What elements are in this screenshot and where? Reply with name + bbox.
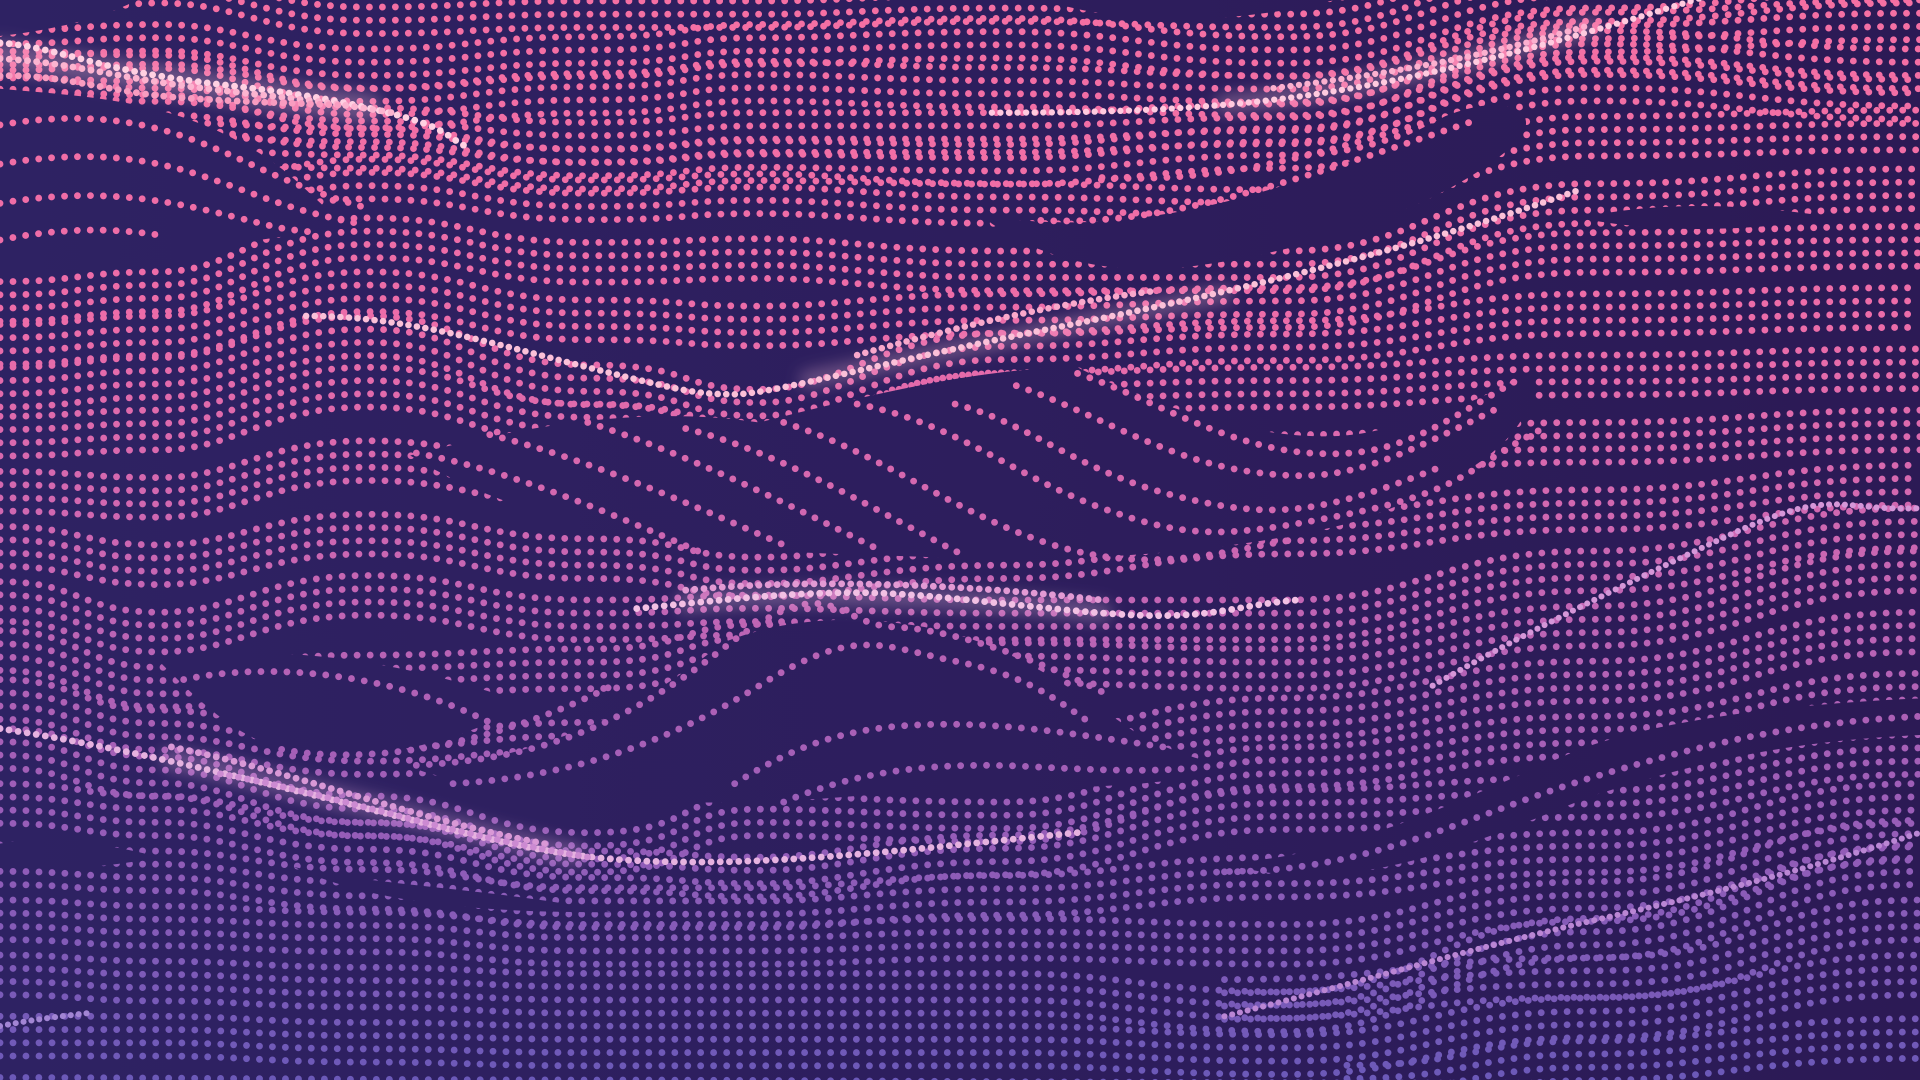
bright ridge: central pink wave (306, 190, 1580, 394)
bright ridge: lower left wave (0, 729, 1078, 862)
bright ridge: right purple wave (1433, 504, 1920, 686)
bright ridge: top right (992, 0, 1702, 113)
bright ridge: lower right wave (1224, 833, 1920, 1016)
bright ridge: middle horizontal wave (637, 584, 1298, 616)
bright ridge: top left (0, 43, 471, 149)
soft glow under the bright ridges (0, 27, 1592, 855)
bright ridge: bottom left (0, 1013, 92, 1026)
